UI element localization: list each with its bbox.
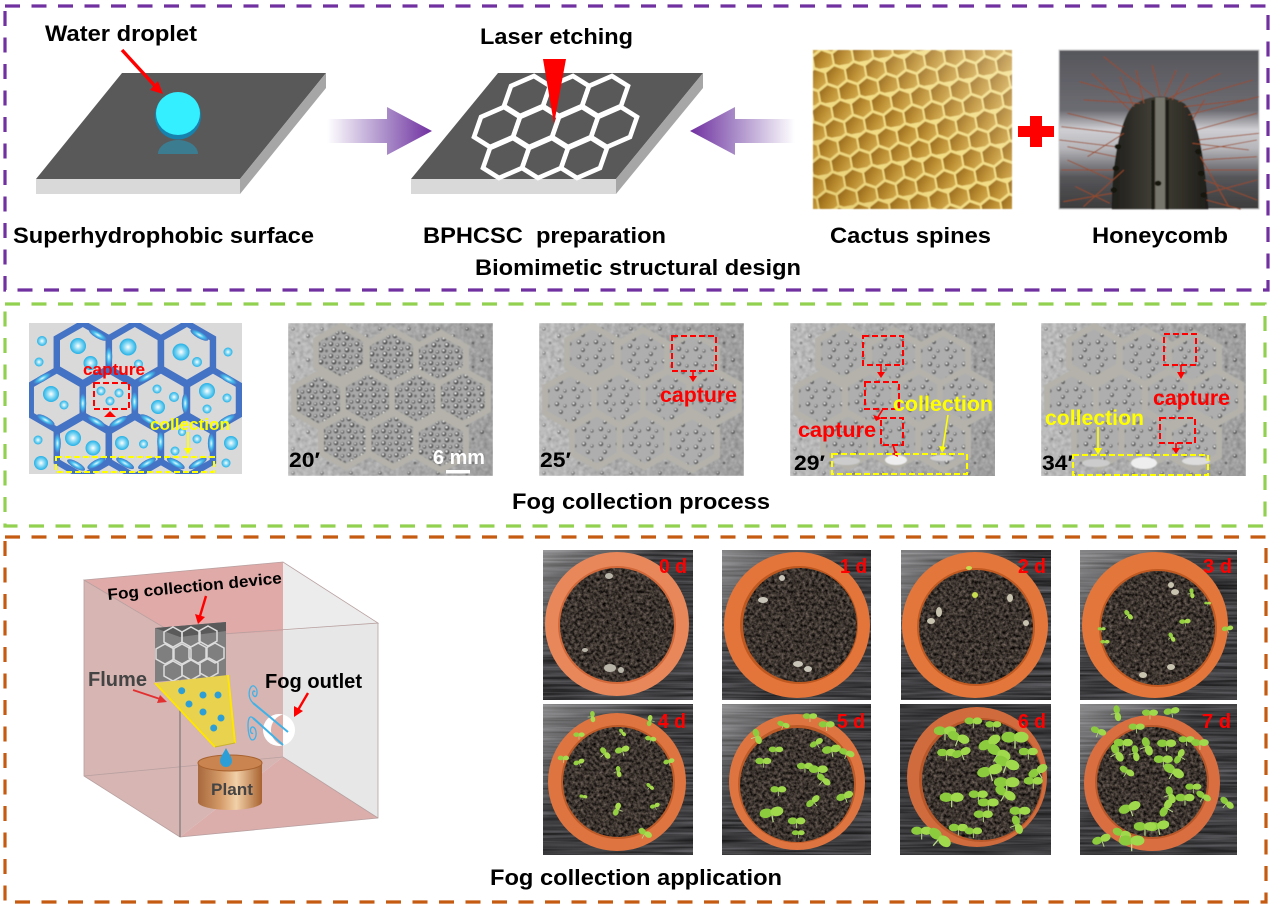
label: laser etching: Laser etching — [480, 24, 633, 49]
photo: 29 min: collection — [893, 393, 993, 416]
photo: cactus — [1059, 50, 1259, 209]
photo: pot 3 d — [1080, 550, 1237, 700]
panel: fog collection process — [5, 304, 1265, 526]
photo: 29 min: 29′ — [794, 452, 825, 475]
label: water droplet: Water droplet — [45, 21, 198, 46]
photo: pot 7 d: 7 d — [1202, 711, 1231, 733]
photo: 20 min: 20′ — [289, 449, 320, 472]
label: honeycomb: Honeycomb — [1092, 223, 1228, 248]
label: superhydrophobic surface: Superhydrophobic surface — [13, 223, 314, 248]
flume — [155, 675, 235, 747]
photo: pot 1 d: 1 d — [840, 556, 867, 578]
arrow: inspiration to BPHCSC — [690, 107, 795, 155]
photo: pot 4 d: 4 d — [658, 711, 686, 733]
panel: fog collection application — [5, 537, 1266, 902]
photo: pot 2 d: 2 d — [1018, 556, 1046, 578]
photo: pot 6 d — [900, 704, 1051, 855]
water droplet — [155, 92, 201, 154]
photo: pot 7 d — [1080, 704, 1237, 855]
plant pot: Plant — [211, 780, 253, 799]
photo: 25 min: 25′ — [540, 449, 571, 472]
heading: biomimetic structural design: Biomimetic structural design — [475, 255, 801, 280]
schematic: capture and collection — [29, 323, 242, 477]
icon: plus — [1018, 116, 1054, 147]
photo: pot 2 d — [901, 550, 1051, 700]
photo: honeycomb — [813, 50, 1012, 209]
photo: 20 min: 6 mm — [433, 447, 485, 469]
photo: pot 0 d: 0 d — [659, 556, 687, 578]
schematic: capture and collection: capture — [83, 360, 145, 379]
photo: 34 min: collection — [1045, 407, 1144, 430]
fog collection device — [155, 622, 226, 682]
photo: 20 min — [288, 323, 493, 476]
arrow: plate to BPHCSC — [327, 107, 432, 155]
plant pot — [198, 755, 262, 810]
arrow: outlet — [294, 693, 308, 717]
label: fog outlet: Fog outlet — [265, 671, 362, 693]
photo: 29 min — [790, 323, 996, 477]
photo: 34 min: capture — [1153, 387, 1230, 410]
diagram: fog collection chamber — [84, 562, 378, 837]
heading: fog collection process: Fog collection process — [512, 489, 770, 514]
schematic: capture and collection: collection — [150, 415, 230, 434]
photo: 25 min: capture — [660, 384, 737, 407]
fog outlet — [248, 686, 295, 746]
heading: fog collection application: Fog collection application — [490, 865, 782, 890]
superhydrophobic plate — [36, 73, 326, 194]
photo: pot 0 d — [543, 550, 693, 700]
photo: pot 6 d: 6 d — [1018, 711, 1046, 733]
photo: 34 min — [1041, 323, 1246, 477]
photo: 29 min: capture — [798, 419, 876, 442]
arrow: to droplet — [122, 50, 163, 94]
photo: pot 5 d: 5 d — [837, 711, 865, 733]
photo: pot 4 d — [543, 704, 693, 855]
panel: biomimetic structural design — [5, 6, 1268, 290]
photo: 25 min — [539, 323, 744, 476]
laser beam — [543, 59, 566, 124]
photo: pot 5 d — [722, 704, 871, 855]
label: cactus spines: Cactus spines — [830, 223, 991, 248]
label: flume: Flume — [88, 669, 147, 691]
arrow: device — [195, 596, 206, 624]
photo: 34 min: 34′ — [1042, 452, 1073, 475]
label: BPHCSC preparation: BPHCSC preparation — [423, 223, 666, 248]
BPHCSC etched plate — [411, 73, 703, 194]
photo: pot 1 d — [722, 550, 871, 700]
photo: pot 3 d: 3 d — [1203, 556, 1232, 578]
arrow: flume — [133, 690, 167, 703]
label: fog collection device: Fog collection device — [107, 570, 283, 604]
water drop — [220, 748, 232, 767]
